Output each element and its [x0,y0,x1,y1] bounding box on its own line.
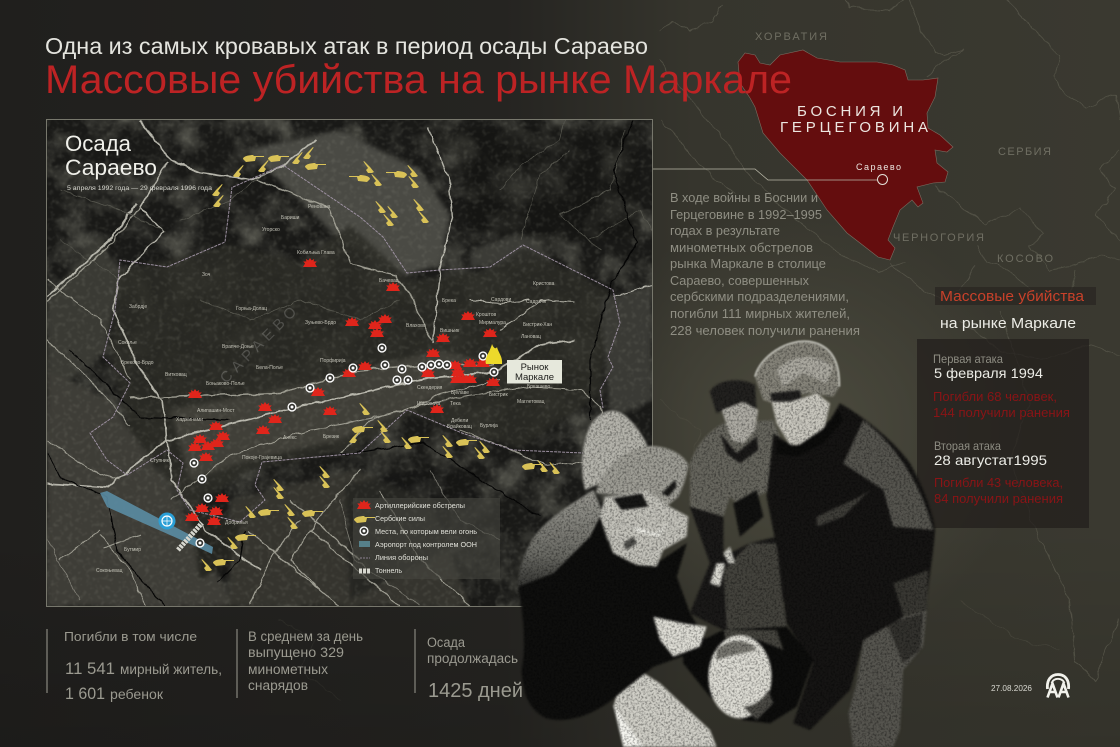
photo: victim head [708,635,773,720]
first attack: 144 получили ранения [933,406,1070,420]
first attack [933,352,1070,420]
first attack: 5 февраля 1994 [934,365,1043,381]
small place names: Бариши [281,215,300,221]
markers: artillery shelling [185,258,500,525]
small place names: Сардови [491,297,511,303]
second attack: Вторая атака [934,439,1001,453]
small place names: Широкача [417,401,441,407]
stat: victims: 1 601 [65,684,105,703]
defense line [90,165,620,522]
body paragraph: рынка Маркале в столице [670,256,826,271]
body paragraph: Герцеговине в 1992–1995 [670,207,822,222]
legend: Артиллерийские обстрелы [375,501,465,510]
small place names: Тека [450,401,461,407]
photo: right man [755,341,935,747]
markers: places under fire [189,343,499,548]
callout: Markale market: Рынок [521,362,549,373]
small place names: Хаджинами [176,417,203,423]
legend [353,498,500,579]
photo: highlight around head [755,341,839,387]
body paragraph: Сараево, совершенных [670,273,809,288]
small place names: Боњаково-Поље [206,381,245,387]
title: Массовые убийства на рынке Маркале [45,58,792,102]
small place names: Вишњик [440,328,460,334]
country labels [755,31,1053,265]
small place names: Добринья [225,520,248,526]
small place names: Лановац [521,334,541,340]
stat: daily shells: В среднем за день [248,629,363,644]
small place names: Врапче-Доње [222,344,254,350]
background regional map borders [280,0,1120,700]
legend: Места, по которым вели огонь [375,527,477,536]
rivers [47,120,637,606]
icon: UN emblem [158,512,176,530]
stat: victims: 11 541 [65,659,115,678]
stat: victims: мирный житель, [120,662,222,677]
stat: siege duration: Осада [427,635,465,650]
country labels: ЧЕРНОГОРИЯ [893,232,984,244]
country labels: СЕРБИЯ [998,146,1051,158]
small place names [96,204,555,574]
small place names: Влахово [406,323,426,329]
stat: victims: Погибли в том числе [64,629,197,644]
stat: victims: ребенок [110,687,163,702]
label: Bosnia and Herzegovina: ГЕРЦЕГОВИНА [780,119,928,136]
small place names: Бела-Поље [256,365,283,371]
small place names: Мирмалура [479,320,506,326]
small place names: Бутмир [124,547,141,553]
small place names: Сокоњевац [96,568,123,574]
photo: middle man [690,380,787,630]
icon: tunnel [178,523,202,550]
small place names: Бурлија [480,423,498,429]
small place names: Маглетовац [517,399,545,405]
stat: victims [46,629,222,703]
small place names: Забрдје [129,304,147,310]
panel: attacks heading [935,287,1096,332]
photo: rescuers carrying a victim [518,341,935,747]
stat: daily shells [236,629,363,698]
map place name: Sarajevo canton: САРАЕВО [217,300,304,387]
body paragraph: сербскими подразделениями, [670,289,849,304]
UN airport [100,491,213,554]
second attack: Погибли 43 человека, [934,476,1063,490]
icon: flame [486,344,502,364]
small place names: Садрачи [526,299,546,305]
callout: Markale market [507,360,562,384]
body paragraph: годах в результате [670,223,780,238]
markers: Serbian forces [201,147,560,571]
stat: siege duration: 1425 дней [428,680,523,702]
Sarajevo locator with leader line: Сараево [856,162,901,172]
label: Bosnia and Herzegovina: БОСНИЯ И [797,103,903,120]
small place names: Ступник [150,458,170,464]
stat: daily shells: минометных [248,662,328,677]
panel: attacks [917,339,1089,528]
legend: Сербские силы [375,514,425,523]
first attack: Первая атака [933,352,1003,366]
stat: siege duration: продолжадась [427,651,518,666]
body paragraph [670,190,860,338]
map of Bosnia and Herzegovina [738,50,953,260]
small place names: Ренована [308,204,331,210]
legend: Аэропорт под контролем ООН [375,540,477,549]
small place names: Витковац [165,372,187,378]
small place names: Анекс [283,435,297,441]
panel: siege map [46,120,652,607]
date: 27.08.2026 [991,684,1033,693]
Sarajevo locator with leader line [653,162,901,184]
country labels: КОСОВО [997,253,1053,265]
second attack: 28 августат1995 [934,452,1047,468]
small place names: Бркашево [527,384,551,390]
stat: daily shells: выпущено 329 [248,645,344,660]
body paragraph: погибли 111 мирных жителей, [670,306,850,321]
small place names: Брезик [323,434,340,440]
small place names: Зуњево-Брдо [305,320,336,326]
stat: siege duration [414,629,523,702]
small place names: Кристова [533,281,555,287]
stat: daily shells: снарядов [248,678,308,693]
small place names: Кроштов [476,312,496,318]
body paragraph: В ходе войны в Боснии и [670,190,818,205]
roads [47,120,652,607]
panel: attacks heading: Массовые убийства [940,289,1085,305]
small place names: Бистрик-Хан [523,322,552,328]
body paragraph: минометных обстрелов [670,240,813,255]
label: Bosnia and Herzegovina [780,103,928,136]
small place names: Зоч [202,272,211,278]
small place names: Бачевац [379,278,399,284]
small place names: Покоје-Грајевица [242,455,282,461]
map heading: 5 апреля 1992 года — 29 февраля 1996 года [67,185,212,192]
title: Одна из самых кровавых атак в период осады Сараево [45,33,648,59]
legend: Тоннель [375,566,402,575]
small place names: Бјелаве [451,390,469,396]
photo: left man [518,411,710,720]
second attack [934,439,1063,506]
map heading [65,131,212,192]
small place names: Сокоље [118,340,137,346]
country labels: ХОРВАТИЯ [755,31,827,43]
logo: AA [1047,674,1069,698]
map terrain [47,120,652,606]
small place names: Дебели [451,418,468,424]
legend: Линия обороны [375,553,428,562]
photo: victim [613,627,813,747]
body paragraph: 228 человек получили ранения [670,323,860,338]
small place names: Порфирија [320,358,346,364]
small place names: Бреково-Брдо [121,360,154,366]
small place names: Бистрик [489,392,508,398]
map heading: Осада [65,131,132,156]
panel: attacks heading: на рынке Маркале [940,316,1076,332]
small place names: Брайковац [447,423,472,430]
map heading: Сараево [65,155,157,180]
small place names: Угорско [262,227,280,233]
first attack: Погибли 68 человек, [933,390,1057,404]
small place names: Кобиљња Глава [297,250,335,256]
small place names: Скендерия [417,385,443,391]
small place names: Брека [442,298,456,304]
small place names: Алипашин-Мост [197,408,235,414]
title [45,33,792,102]
small place names: Горња-Долац [236,306,267,312]
callout: Markale market: Маркале [515,372,554,383]
second attack: 84 получили ранения [934,492,1063,506]
